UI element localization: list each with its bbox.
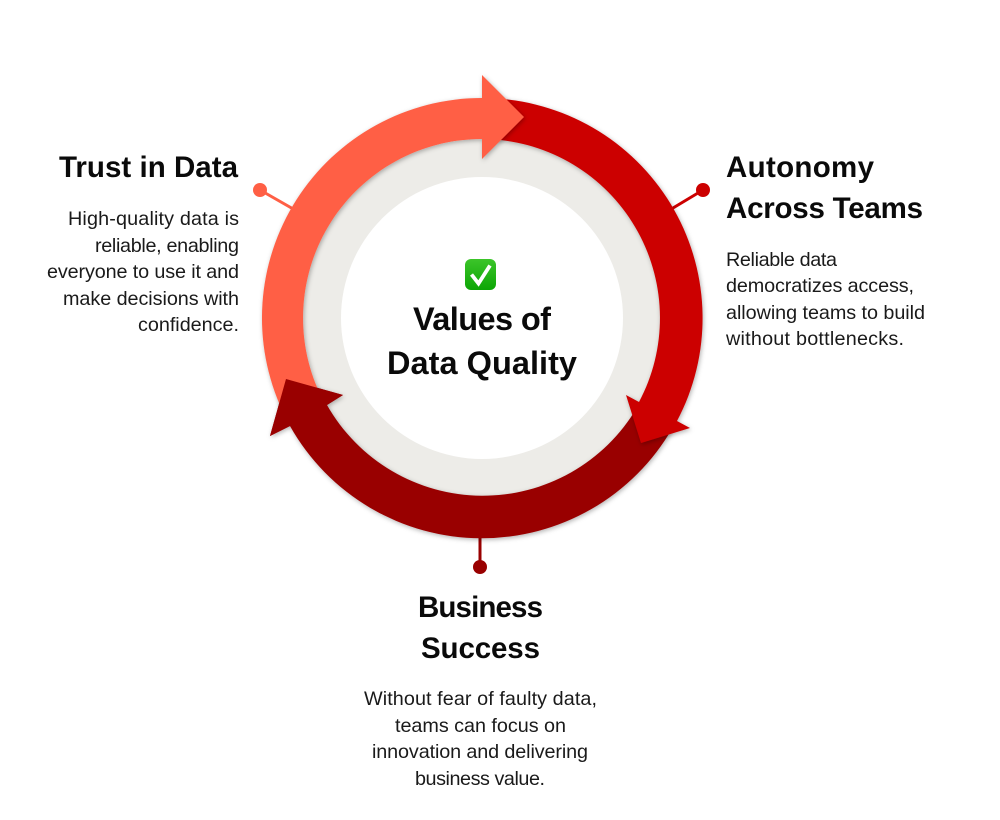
text block: trust in data: reliable, enabling — [95, 235, 239, 257]
text block: autonomy across teams — [725, 249, 925, 350]
arrow: business success (dark red) — [270, 379, 672, 538]
text block: trust in data: everyone to use it and — [47, 261, 239, 283]
title: Data Quality — [387, 345, 577, 381]
panel: business success — [364, 591, 597, 790]
arrowhead: business success overlap — [270, 379, 343, 436]
panel: autonomy across teams — [725, 151, 925, 350]
arrow: trust in data (coral) — [262, 75, 524, 411]
text block: autonomy across teams: without bottlenecks. — [725, 328, 904, 350]
text block: business success: teams can focus on — [395, 715, 566, 737]
text block: trust in data: confidence. — [138, 314, 239, 336]
title — [387, 301, 577, 381]
text block: trust in data: High-quality data is — [68, 208, 239, 230]
heading: autonomy across teams: Across Teams — [726, 192, 923, 225]
connector: business success — [473, 532, 487, 574]
heading: autonomy across teams — [726, 151, 923, 225]
text block: business success: business value. — [415, 768, 545, 790]
text block: trust in data: make decisions with — [63, 288, 239, 310]
text block: autonomy across teams: democratizes access, — [726, 275, 914, 297]
text block: autonomy across teams: allowing teams to build — [726, 302, 925, 324]
heading: trust in data: Trust in Data — [59, 151, 239, 184]
arrow: autonomy (red) — [495, 98, 703, 443]
connector: trust in data — [253, 183, 295, 210]
icon: green check mark — [465, 259, 496, 290]
connector: autonomy across teams — [668, 183, 710, 211]
title: Values of — [413, 301, 551, 337]
text block: business success: innovation and delivering — [372, 741, 588, 763]
heading: business success — [418, 591, 543, 665]
heading: business success: Business — [418, 591, 543, 624]
heading: autonomy across teams: Autonomy — [726, 151, 875, 184]
text block: autonomy across teams: Reliable data — [726, 249, 837, 271]
centre ring — [303, 139, 661, 497]
heading: business success: Success — [421, 632, 540, 665]
panel: trust in data — [47, 151, 239, 336]
text block: trust in data — [47, 208, 239, 336]
centre white disc — [341, 177, 623, 459]
text block: business success: Without fear of faulty data, — [364, 688, 597, 710]
text block: business success — [364, 688, 597, 790]
